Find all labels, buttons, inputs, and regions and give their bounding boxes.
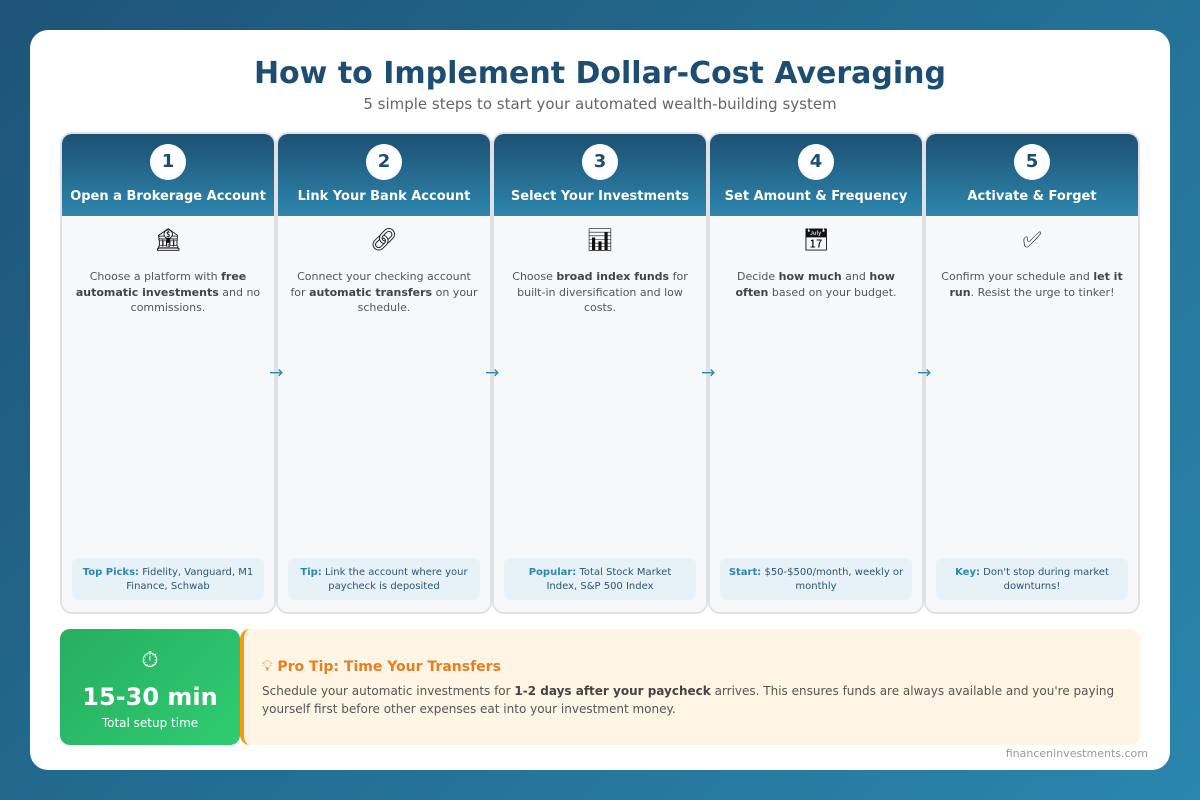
footer: financeninvestments.com [1006,747,1148,760]
panel: step 3: Popular: Total Stock Market Index, S&P 500 Index [529,567,671,592]
panel: step 3: 3 [594,151,606,172]
arrow: → [701,363,715,383]
panel: step 4: Decide how much and how often based on your budget. [735,270,897,298]
panel: step 1: Choose a platform with free automatic investments and no commissions. [76,270,260,314]
panel: step 2: Link Your Bank Account [298,189,470,204]
panel: step 5: Activate & Forget [967,189,1097,204]
arrow: → [269,363,283,383]
panel: step 3: 📊︎ [586,228,614,253]
panel: step 1: Top Picks: Fidelity, Vanguard, M1 Finance, Schwab [83,567,253,592]
panel: step 4: Start: $50-$500/month, weekly or monthly [729,567,903,592]
panel: step 2 [276,132,492,614]
panel: pro tip: 💡︎ Pro Tip: Time Your Transfers [262,657,501,675]
panel: step 1: Open a Brokerage Account [70,189,266,204]
panel: step 4: Set Amount & Frequency [725,189,907,204]
arrow: → [485,363,499,383]
panel: step 1: 🏦︎ [154,228,182,253]
panel: step 5 [924,132,1140,614]
panel: step 4: 📅︎ [802,228,830,253]
panel: step 2: Tip: Link the account where your paycheck is deposited [300,567,468,592]
panel: step 5: ✅︎ [1023,228,1041,253]
panel: setup time: ⏱︎ [141,648,159,673]
title: How to Implement Dollar-Cost Averaging [254,56,946,91]
arrow: → [917,363,931,383]
subtitle: 5 simple steps to start your automated wealth-building system [363,95,837,113]
panel: step 3: Select Your Investments [511,189,689,204]
panel: step 4: 4 [810,151,822,172]
panel: setup time [60,629,240,745]
panel: pro tip: Schedule your automatic investments for 1-2 days after your paycheck arrives. This ensures funds are always available and you're paying yourself first before other expenses eat into your investment money. [262,684,1114,716]
panel: step 2: 🔗︎ [370,228,398,253]
panel: step 1 [60,132,276,614]
panel: step 5: Key: Don't stop during market downturns! [955,567,1109,592]
panel: step 2: Connect your checking account for automatic transfers on your schedule. [290,270,478,314]
panel: pro tip [240,629,1140,745]
panel: setup time: 15-30 min [82,683,218,711]
panel: step 3: Choose broad index funds for built-in diversification and low costs. [512,270,688,314]
panel: step 5: 5 [1026,151,1038,172]
panel: step 5: Confirm your schedule and let it run. Resist the urge to tinker! [941,270,1123,298]
panel: step 4 [708,132,924,614]
panel: setup time: Total setup time [102,716,198,730]
panel: step 1: 1 [162,151,174,172]
panel: step 2: 2 [378,151,390,172]
panel: step 3 [492,132,708,614]
